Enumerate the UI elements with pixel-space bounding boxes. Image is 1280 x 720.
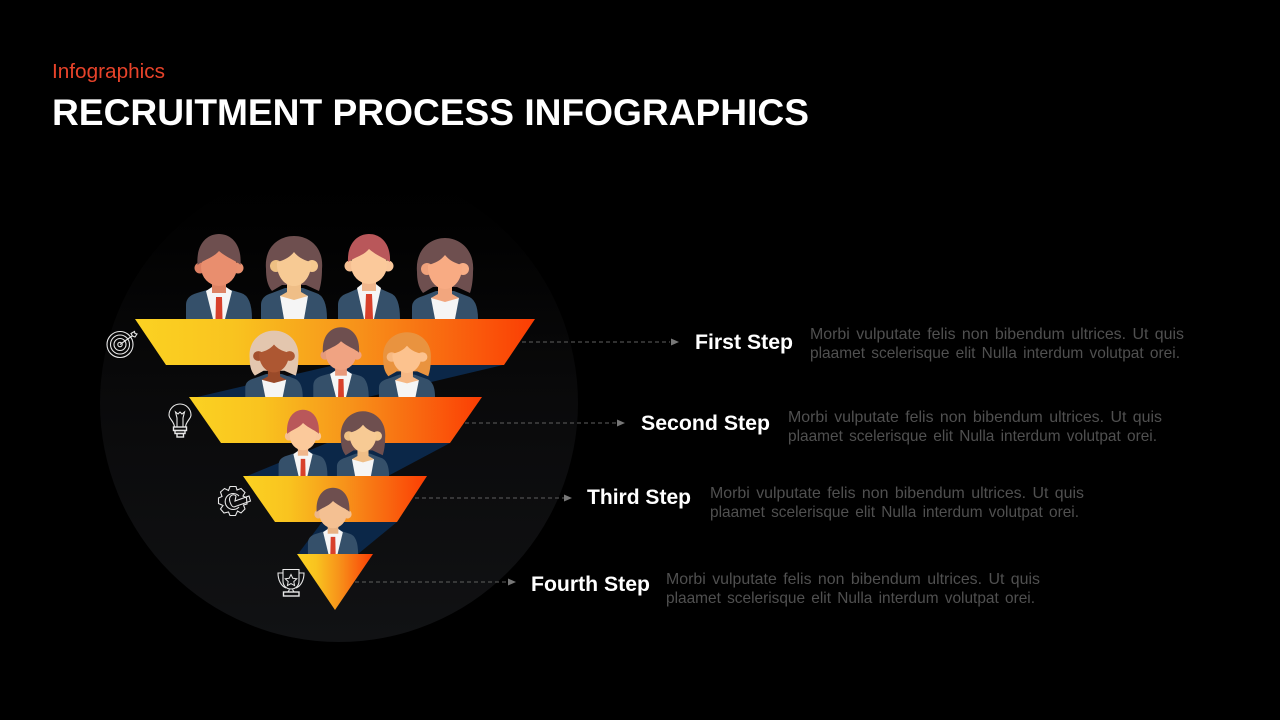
icon: gear with wrench xyxy=(218,486,250,516)
step 4 label: Fourth Step xyxy=(531,573,650,596)
second row of candidates xyxy=(245,327,435,397)
step 3 description: Morbi vulputate felis non bibendum ultrices. Ut quis xyxy=(710,485,1084,502)
step 2 description xyxy=(788,409,1162,445)
title: RECRUITMENT PROCESS INFOGRAPHICS xyxy=(52,92,809,133)
step 3 description xyxy=(710,485,1084,521)
final candidate xyxy=(308,488,358,554)
step 4 description: plaamet scelerisque elit Nulla interdum volutpat orei. xyxy=(666,590,1035,607)
icon: target xyxy=(107,332,137,358)
third row of candidates xyxy=(279,410,389,476)
funnel tier 3 xyxy=(243,476,427,522)
candidate: man 3 xyxy=(338,234,400,319)
candidate: woman with brown hair xyxy=(337,411,389,476)
candidate: woman with orange hair xyxy=(379,332,435,397)
candidate: woman 4 xyxy=(412,238,478,319)
funnel tier 2 xyxy=(189,397,482,443)
candidate: man in middle xyxy=(313,327,369,397)
step 4 description xyxy=(666,571,1040,607)
funnel tier 1 xyxy=(135,319,535,365)
candidate: woman 2 xyxy=(261,236,327,319)
icon: trophy xyxy=(278,570,304,596)
candidate: man 1 xyxy=(186,234,252,319)
icon: light bulb xyxy=(169,404,191,437)
step 1 description: Morbi vulputate felis non bibendum ultrices. Ut quis xyxy=(810,326,1184,343)
funnel shadows xyxy=(197,365,503,554)
candidate: woman with dark skin xyxy=(245,331,303,397)
background circle xyxy=(100,164,578,642)
step 3 label: Third Step xyxy=(587,486,691,509)
step 4 connector arrow xyxy=(355,578,516,586)
step 3 connector arrow xyxy=(415,494,572,502)
step 3 description: plaamet scelerisque elit Nulla interdum volutpat orei. xyxy=(710,504,1079,521)
funnel tier 4 xyxy=(297,554,373,610)
step 1 label: First Step xyxy=(695,331,793,354)
step 1 description: plaamet scelerisque elit Nulla interdum volutpat orei. xyxy=(810,345,1180,362)
candidate: man with red hair xyxy=(279,410,327,476)
step 2 connector arrow xyxy=(465,420,625,426)
step 2 description: Morbi vulputate felis non bibendum ultrices. Ut quis xyxy=(788,409,1162,426)
eyebrow heading: Infographics xyxy=(52,60,165,83)
top row of candidates xyxy=(186,234,478,319)
step 2 label: Second Step xyxy=(641,412,770,435)
step 1 description xyxy=(810,326,1184,362)
step 2 description: plaamet scelerisque elit Nulla interdum volutpat orei. xyxy=(788,428,1157,445)
step 1 connector arrow xyxy=(522,338,679,346)
step 4 description: Morbi vulputate felis non bibendum ultrices. Ut quis xyxy=(666,571,1040,588)
